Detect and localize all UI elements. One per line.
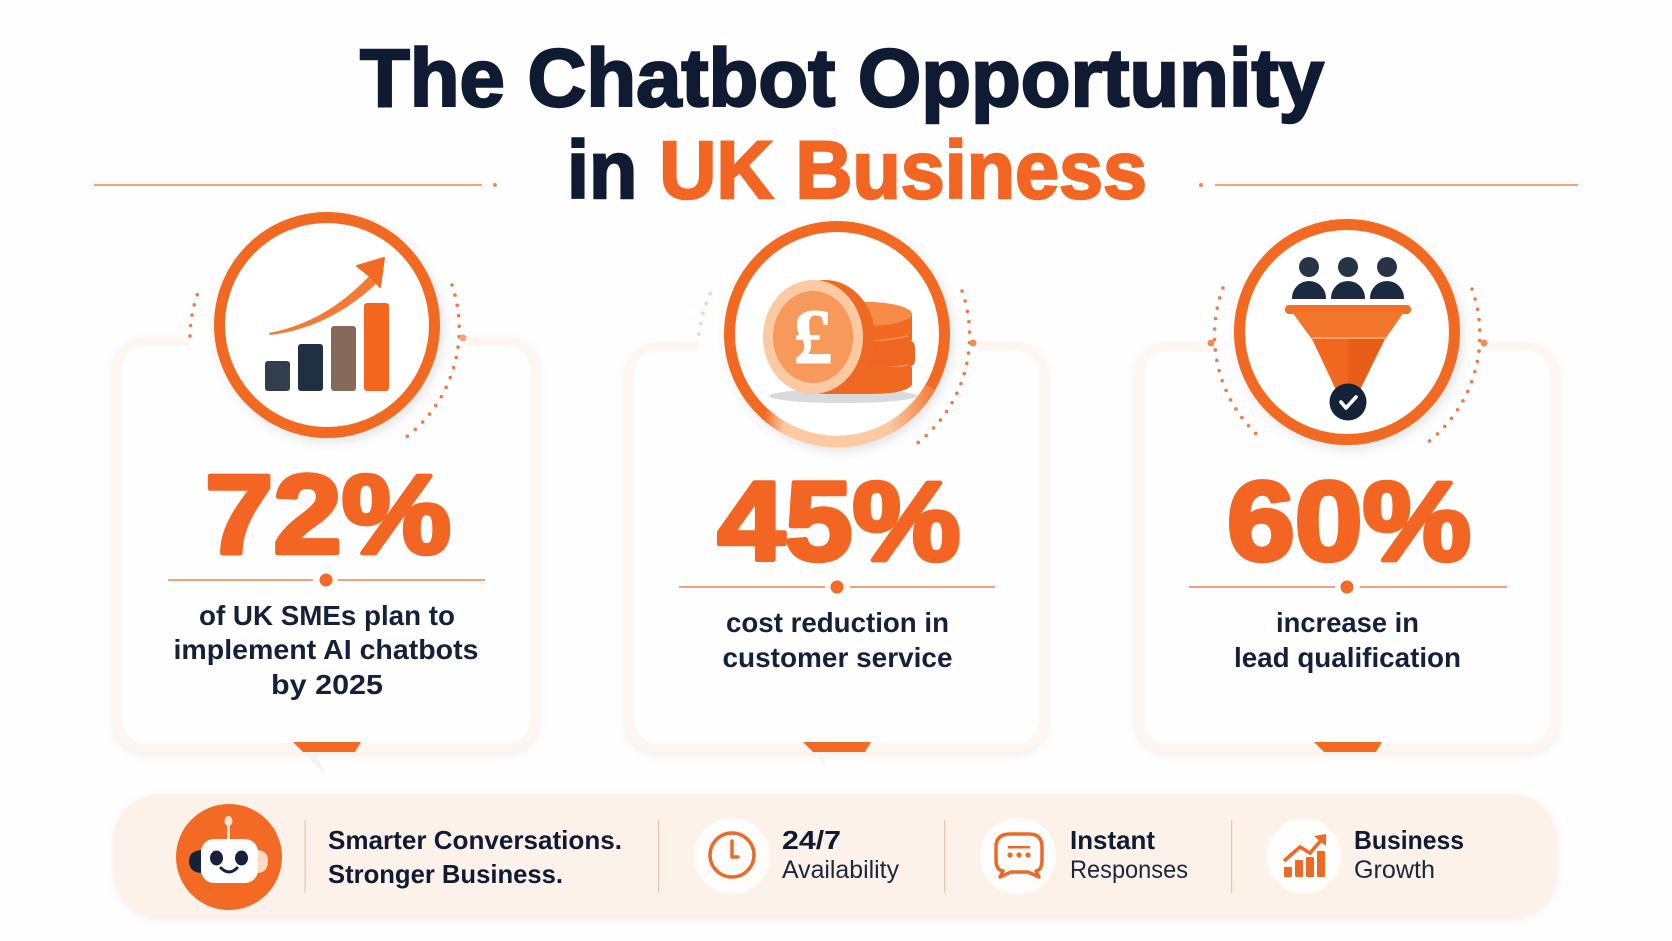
dotted arcs <box>190 285 466 441</box>
dotted arcs <box>1208 288 1488 446</box>
description <box>722 607 952 673</box>
divider <box>1189 580 1507 594</box>
tagline: Smarter Conversations. <box>328 825 622 855</box>
stat value: 45% <box>718 459 960 584</box>
icon: robot <box>176 804 282 910</box>
stat value: 72% <box>205 452 451 577</box>
notch <box>293 742 361 752</box>
divider <box>168 574 485 586</box>
description: customer service <box>722 642 952 673</box>
tagline: Stronger Business. <box>328 859 563 889</box>
panel: 60% stat <box>1135 224 1559 752</box>
business growth <box>1354 825 1464 884</box>
description: increase in <box>1276 607 1419 638</box>
description <box>174 600 478 700</box>
bar background <box>114 794 1557 917</box>
border gap behind ring <box>699 330 977 354</box>
card frame <box>113 337 539 752</box>
icon: pound coins <box>763 280 917 403</box>
panel: 45% stat <box>625 226 1048 768</box>
title flourish right <box>1199 183 1578 187</box>
icon: lead funnel <box>1285 257 1411 420</box>
dotted arcs <box>699 290 976 447</box>
icon: rising bar chart <box>265 258 389 391</box>
divider 2 <box>658 820 659 893</box>
description: cost reduction in <box>726 607 949 638</box>
description: implement AI chatbots <box>174 634 478 665</box>
border gap behind ring <box>1208 330 1487 354</box>
24/7 availability: Availability <box>782 856 899 884</box>
icon: pound coins: £ <box>794 293 832 380</box>
24/7 availability <box>782 825 899 884</box>
icon: growth chart <box>1266 818 1342 894</box>
icon: chat bubble <box>980 818 1056 894</box>
icon ring <box>730 226 944 442</box>
card frame <box>625 342 1048 752</box>
description: by 2025 <box>271 669 383 700</box>
notch <box>1314 742 1382 752</box>
card pointer shadow <box>303 752 326 776</box>
description <box>1234 607 1461 673</box>
stat value: 60% <box>1227 459 1471 584</box>
tagline <box>328 825 622 889</box>
business growth: Business <box>1354 825 1464 855</box>
business growth: Growth <box>1354 856 1435 884</box>
border gap behind ring <box>190 325 468 349</box>
card frame <box>1135 342 1559 752</box>
notch <box>803 742 871 752</box>
title <box>360 33 1324 216</box>
title line 1: The Chatbot Opportunity <box>360 33 1324 124</box>
description: of UK SMEs plan to <box>199 600 455 631</box>
card pointer shadow <box>813 752 826 768</box>
divider 3 <box>944 820 945 893</box>
divider 4 <box>1231 820 1232 893</box>
instant responses: Instant <box>1070 825 1155 855</box>
icon ring <box>1240 224 1454 440</box>
title line 2: in UK Business <box>567 125 1147 216</box>
description: lead qualification <box>1234 642 1461 673</box>
divider <box>679 580 995 594</box>
panel: 72% stat <box>113 218 539 776</box>
bottom benefits bar <box>114 794 1557 917</box>
icon ring <box>220 218 434 432</box>
instant responses: Responses <box>1070 856 1188 884</box>
icon: clock <box>694 818 770 894</box>
divider 1 <box>304 820 306 893</box>
title flourish left <box>94 183 497 187</box>
instant responses <box>1070 825 1188 884</box>
24/7 availability: 24/7 <box>782 825 841 855</box>
